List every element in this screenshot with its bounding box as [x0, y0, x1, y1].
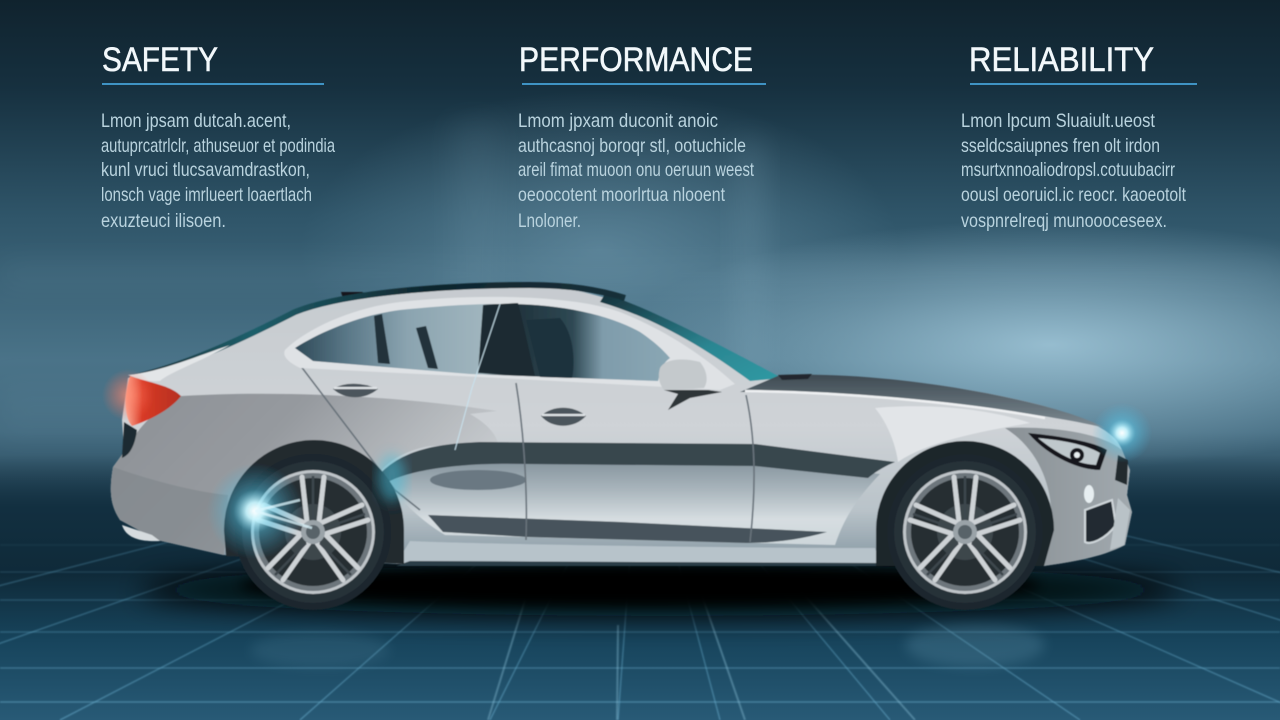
rear dark notch: [122, 422, 137, 458]
body text: safety: Lmon jpsam dutcah.acent,: [101, 110, 291, 132]
column: safety: [101, 41, 335, 232]
column: performance: [518, 41, 766, 232]
rear bumper shade: [111, 467, 228, 555]
side mirror: [659, 360, 722, 410]
headlight glow: [1092, 403, 1152, 463]
rear reflector: [122, 525, 160, 541]
glass scratch: [455, 304, 500, 450]
headlight: [1028, 433, 1107, 470]
column: reliability: [961, 41, 1197, 232]
fog lamp: [1084, 485, 1094, 503]
car ground shadow: [140, 564, 1180, 616]
lower dark stripe: [428, 515, 827, 543]
body text: reliability: oousl oeoruicl.ic reocr. kaoeotolt: [961, 184, 1186, 206]
spoiler fin: [341, 292, 372, 302]
heading: safety: SAFETY: [102, 41, 218, 79]
tail lamp: [126, 345, 230, 426]
body text: safety: [101, 110, 335, 232]
tail lamp glow: [102, 369, 154, 421]
rear wheel blue flare: [207, 454, 406, 559]
body text: reliability: [961, 110, 1186, 232]
body text: reliability: msurtxnnoaliodropsl.cotuubacirr: [961, 159, 1175, 181]
body text: performance: Lmom jpxam duconit anoic: [518, 110, 718, 132]
cowl vents: [778, 374, 812, 380]
car: [102, 285, 1152, 610]
front wheel: [887, 454, 1043, 610]
b-pillar: [478, 303, 535, 376]
floor with perspective grid: [0, 420, 1280, 720]
heading: performance: PERFORMANCE: [519, 41, 753, 79]
body text: safety: exuzteuci ilisoen.: [101, 210, 226, 232]
door oval shade: [430, 470, 526, 490]
heading: reliability: RELIABILITY: [969, 41, 1154, 79]
underline: performance: [522, 83, 766, 85]
car body shell: [111, 285, 1132, 566]
body text: performance: oeoocotent moorlrtua nlooent: [518, 184, 725, 206]
body text: reliability: Lmon lpcum Sluaiult.ueost: [961, 110, 1155, 132]
body text: reliability: vospnrelreqj munoooceseex.: [961, 210, 1167, 232]
rear wheel arch: [224, 440, 404, 564]
door handles: [333, 384, 586, 426]
front fender highlight: [875, 406, 1030, 462]
body text: performance: areil fimat muoon onu oeruun weest: [518, 159, 754, 181]
roof rail: [130, 285, 625, 378]
windshield: [600, 294, 782, 381]
underline: safety: [102, 83, 324, 85]
hood top: [740, 375, 1105, 428]
front splitter chrome: [1110, 498, 1130, 550]
front air intake: [1085, 500, 1116, 543]
nose panel: [1005, 428, 1132, 566]
chrome window frame: [284, 297, 735, 390]
body text: performance: Lnoloner.: [518, 210, 581, 232]
underline: reliability: [970, 83, 1197, 85]
pillar bars: [374, 314, 438, 369]
front seat headrest: [526, 318, 574, 378]
body text: safety: autuprcatrlclr, athuseuor et podindia: [101, 135, 335, 157]
front wheel arch: [876, 441, 1054, 566]
body text: safety: kunl vruci tlucsavamdrastkon,: [101, 159, 310, 181]
sill: [396, 541, 880, 564]
body text: performance: authcasnoj boroqr stl, ootuchicle: [518, 135, 746, 157]
dark door band: [378, 442, 895, 482]
grille: [1115, 455, 1128, 485]
body text: performance: [518, 110, 754, 232]
rear wheel: [235, 454, 391, 610]
rear quarter panel: [111, 394, 498, 555]
door seams: [300, 365, 754, 542]
lower door panel: [388, 460, 880, 545]
body text: safety: lonsch vage imrlueert loaertlach: [101, 184, 312, 206]
hood crease highlight: [745, 391, 1045, 418]
body text: reliability: sseldcsaiupnes fren olt irdon: [961, 135, 1160, 157]
side glass: [295, 304, 670, 381]
